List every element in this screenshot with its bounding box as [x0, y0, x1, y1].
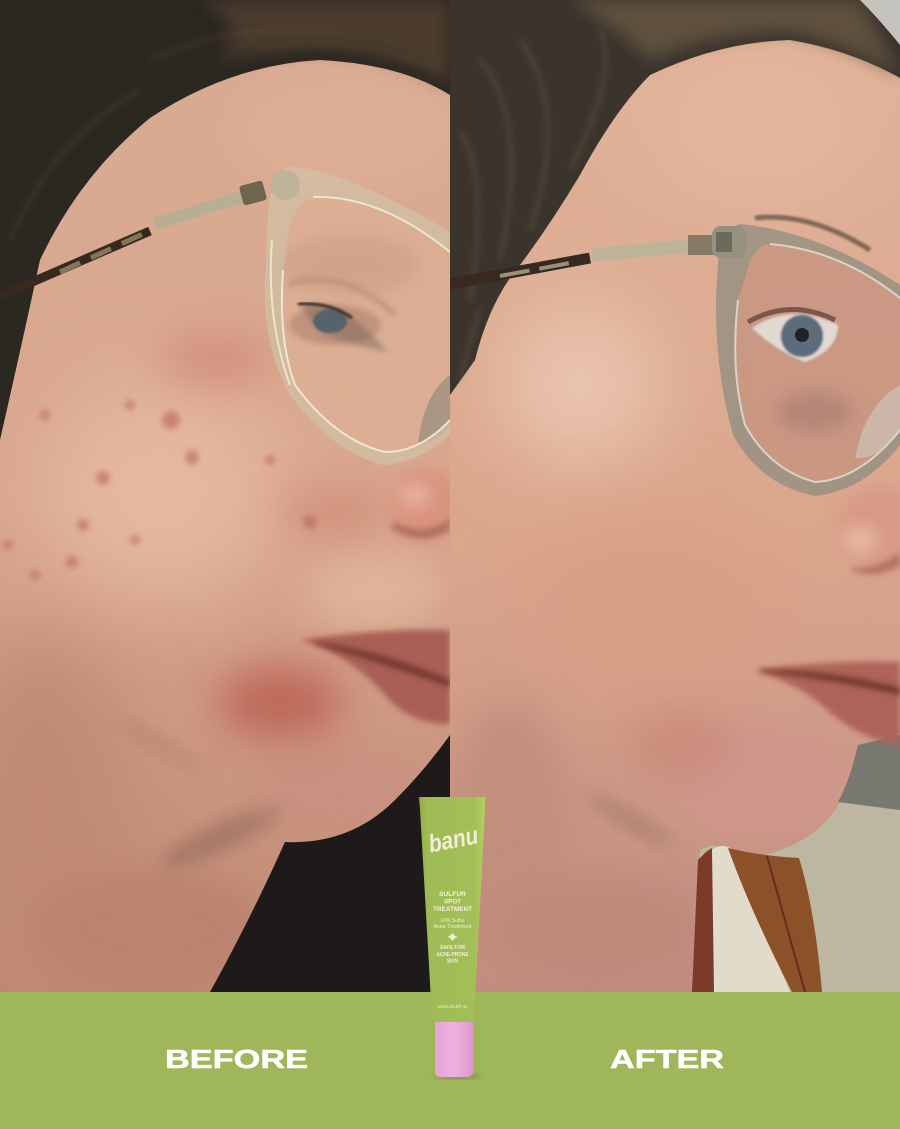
face shading: after: [470, 292, 676, 918]
brand logo: banu: [426, 821, 481, 858]
under-eye shadow: after: [777, 392, 853, 432]
panel: after photo: [450, 0, 900, 1000]
temple arm: after: [450, 235, 714, 284]
product subtitle: Acne Treatment: [434, 924, 472, 930]
safe for claim: ACNE-PRONE: [436, 952, 469, 958]
nose: after: [838, 486, 900, 574]
eye: after: [748, 309, 838, 362]
product name: SULFUR: [439, 891, 466, 898]
label: before: BEFORE: [165, 1044, 308, 1074]
nose: before: [388, 468, 450, 544]
panel: before photo: [0, 0, 461, 1000]
lens tint: before: [284, 317, 368, 445]
glasses frame: after: [712, 224, 900, 496]
product name: [433, 891, 472, 913]
eyebrow: after: [755, 217, 870, 250]
temple arm: before: [0, 180, 267, 296]
safe for claim: SAFE FOR: [440, 945, 465, 951]
label: after: AFTER: [610, 1044, 724, 1074]
footer band: [0, 992, 900, 1129]
product name: SPOT: [444, 898, 461, 906]
nose pad: after: [855, 385, 900, 458]
diamond icon: [447, 933, 458, 941]
product tube: [419, 797, 485, 1078]
hair: before: [0, 0, 450, 440]
volume: 15mL/0.5fl oz: [438, 1004, 468, 1009]
lips: before: [300, 630, 450, 724]
lips: after: [755, 662, 900, 745]
safe for claim: [436, 945, 469, 964]
wall behind neck: [838, 735, 900, 810]
product subtitle: 10% Sulfur: [440, 918, 465, 924]
tube body: [419, 797, 485, 1022]
glasses frame: before: [265, 166, 450, 465]
nose pad: before: [418, 375, 450, 442]
hair: after: [450, 0, 900, 395]
face shading: before: [0, 380, 442, 958]
background wall corner: after: [860, 0, 900, 45]
black shirt: before: [210, 735, 450, 992]
eye: before: [286, 240, 413, 354]
redness: after: [644, 718, 720, 773]
redness and acne marks: before: [3, 332, 385, 738]
safe for claim: SKIN: [447, 958, 458, 964]
product subtitle: [434, 918, 472, 930]
lens tint: after: [735, 244, 900, 482]
brown strap: [728, 848, 822, 992]
tube shadow: [434, 1074, 482, 1078]
product name: TREATMENT: [433, 906, 472, 913]
clothing: after: [692, 735, 900, 992]
white fleece lining: [712, 846, 790, 992]
dark collar strip: [692, 848, 716, 992]
tube cap: [435, 1022, 473, 1077]
